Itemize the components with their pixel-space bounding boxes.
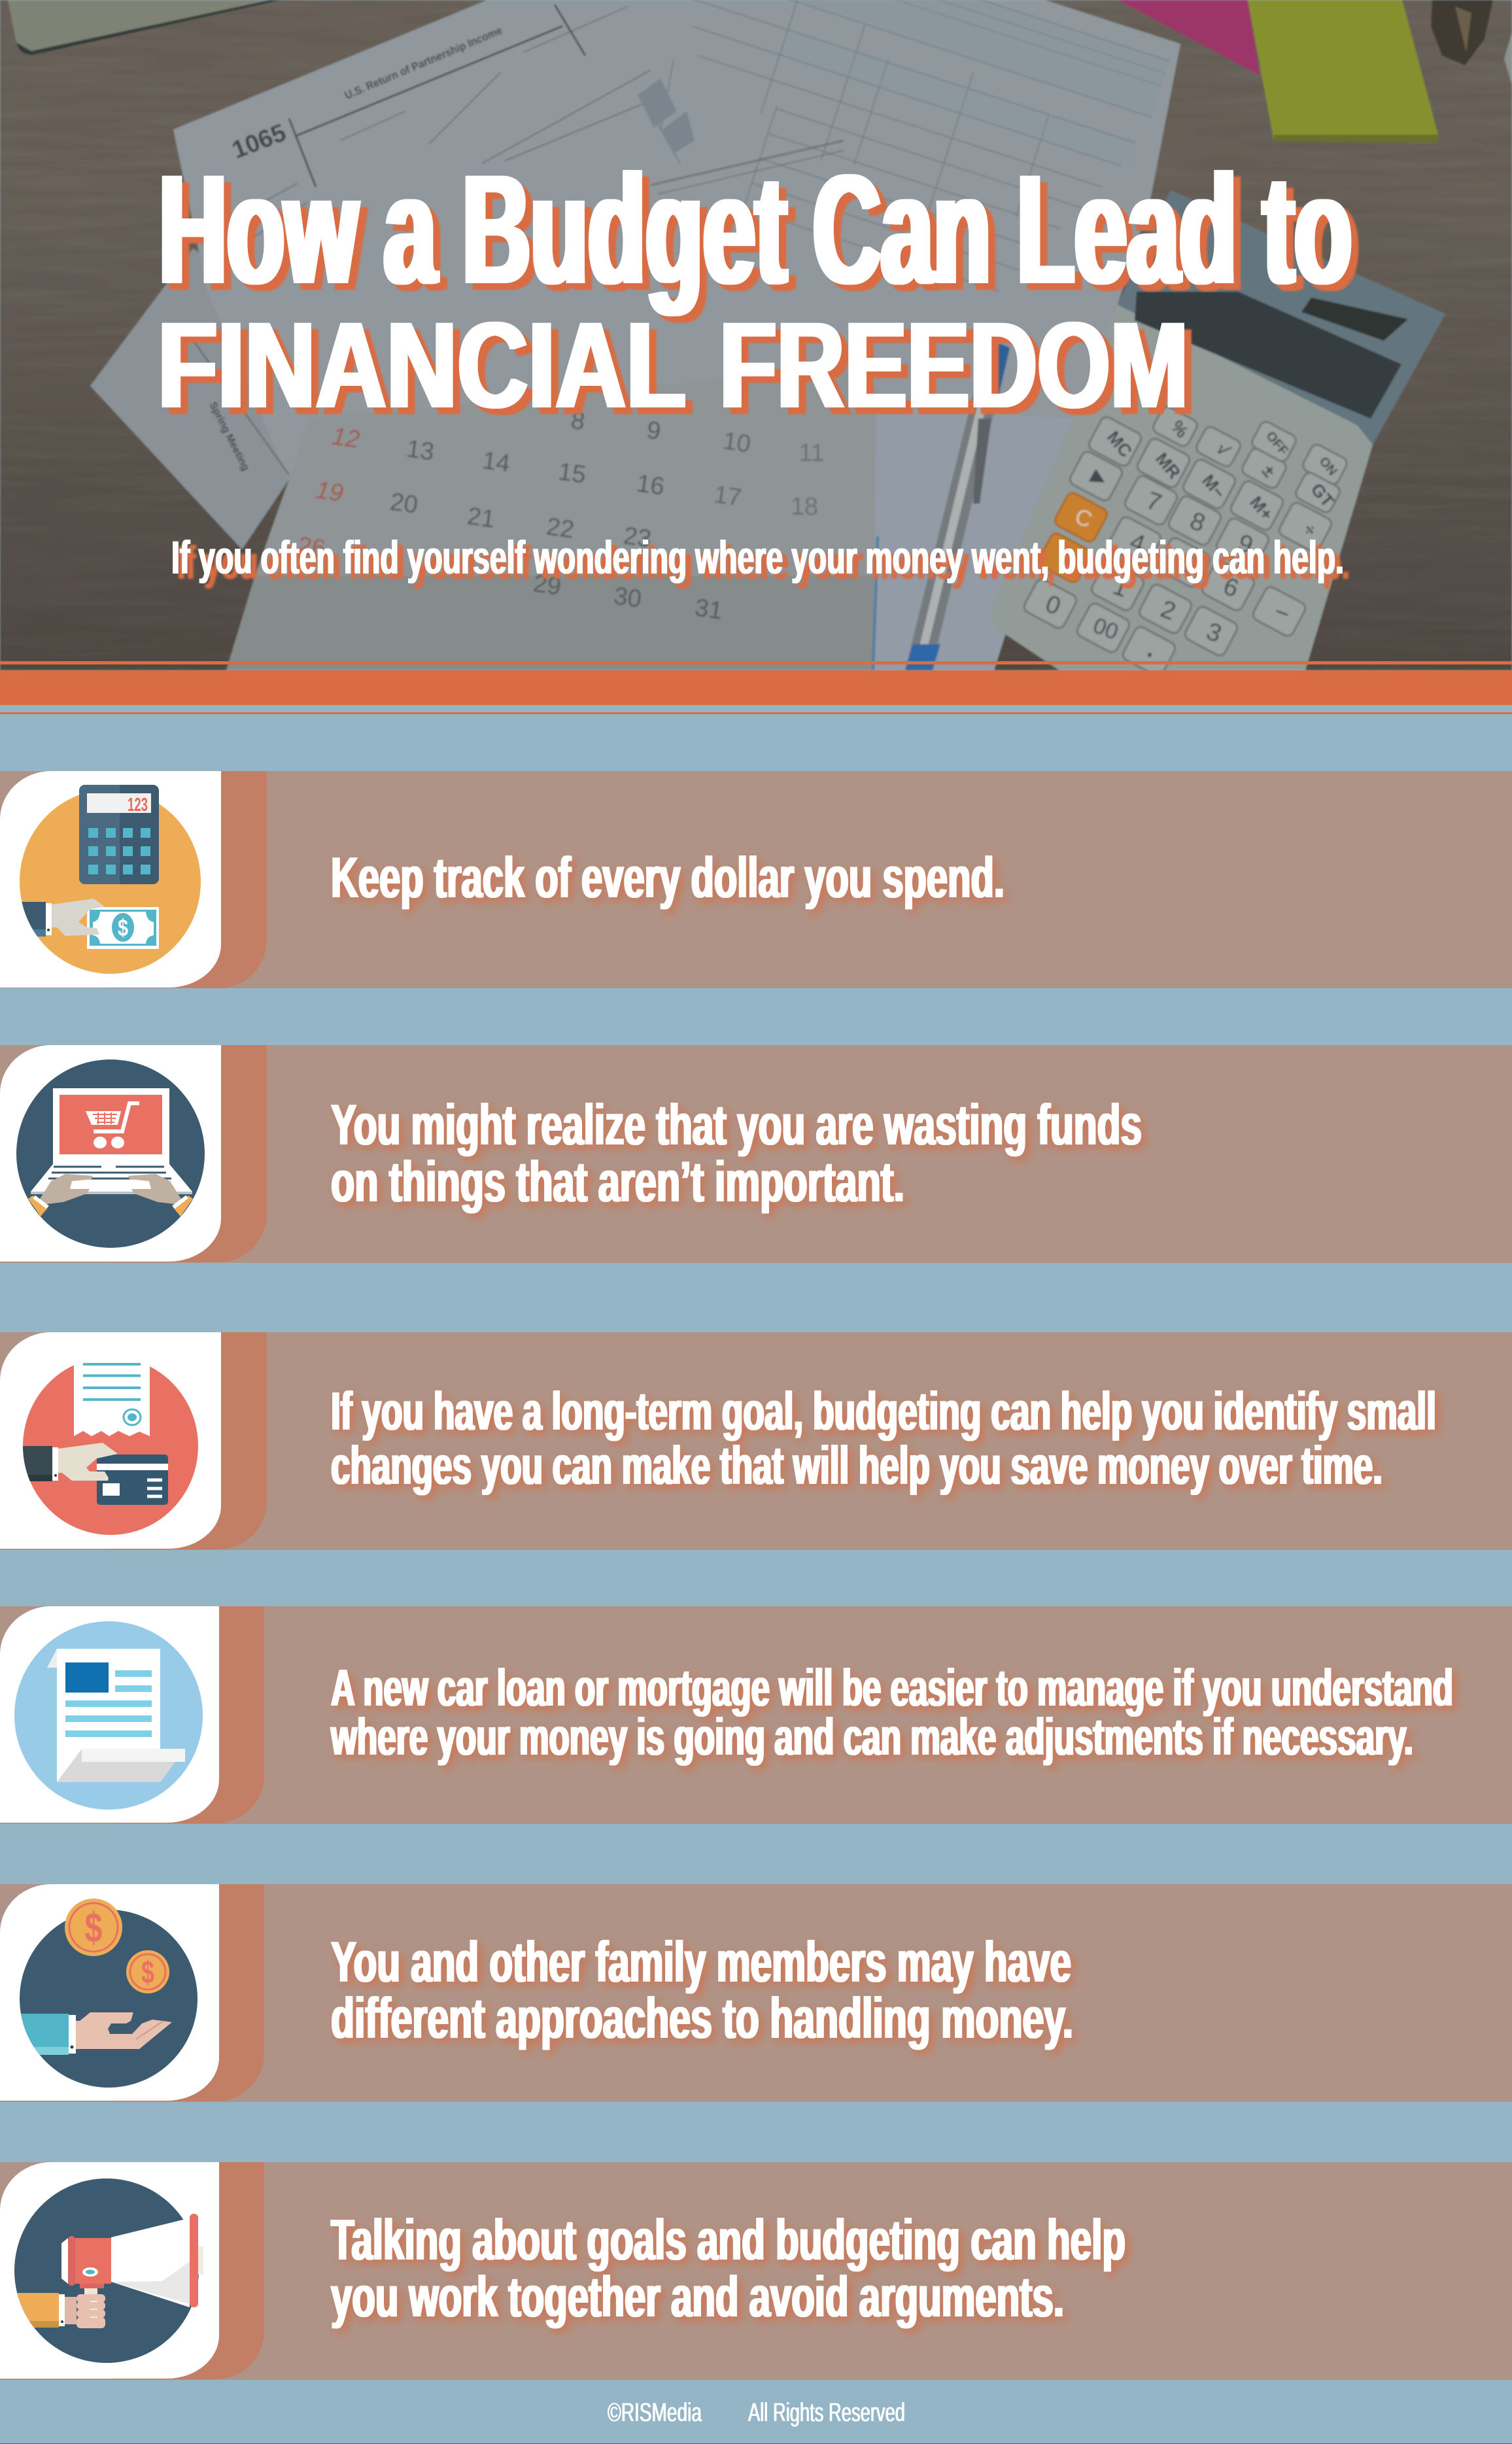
calendar numbers: 23 [622, 522, 653, 553]
calendar numbers: 17 [712, 481, 744, 512]
calendar numbers: 30 [612, 582, 644, 613]
right tax form table [693, 0, 1169, 292]
footer credits: All Rights Reserved [748, 2398, 905, 2427]
form title text in photo [207, 24, 504, 473]
icon: coins above open hand: $ [85, 1904, 102, 1951]
panel: row 3 [0, 1332, 1512, 1550]
calculator: 9 [1234, 529, 1256, 560]
panel: row 6 [0, 2162, 1512, 2380]
calendar numbers: 11 [799, 439, 825, 467]
calendar numbers: 12 [330, 422, 362, 454]
title line 2: FREEDOM [719, 296, 1188, 434]
icon: coins above open hand: $ [141, 1955, 154, 1990]
calculator: 5 [1175, 549, 1197, 579]
row 6 text: you work together and avoid arguments. [331, 2264, 1064, 2329]
title line 2: FINANCIAL [158, 296, 686, 434]
calculator: 00 [1090, 613, 1122, 645]
calculator: M+ [1246, 492, 1277, 525]
calculator: OFF [1263, 429, 1291, 458]
calendar numbers: 21 [466, 502, 497, 534]
calculator: 0 [1042, 590, 1064, 621]
footer credits [608, 2398, 905, 2427]
row 5 text: You and other family members may have [331, 1929, 1071, 1994]
row 3 text [331, 1381, 1436, 1496]
calendar numbers: 22 [545, 513, 576, 544]
calculator: 3 [1203, 617, 1225, 648]
calculator: √ [1212, 439, 1233, 460]
calendar numbers: 9 [645, 417, 662, 445]
icon: coins above open hand [20, 1899, 198, 2088]
calendar numbers: 10 [721, 427, 753, 458]
bottom edge line [0, 2443, 1512, 2444]
form title text in photo: Spring Meeting [207, 400, 251, 473]
calculator: − [1270, 598, 1294, 628]
calculator: 7 [1143, 487, 1165, 517]
row 5 text [331, 1929, 1073, 2050]
pen [905, 343, 1010, 670]
calendar numbers: 19 [314, 476, 345, 508]
calculator: M− [1198, 471, 1229, 503]
orange divider bands [0, 661, 1512, 714]
calendar numbers: 26 [296, 532, 328, 563]
header photo: desk with tax forms, calendar and calculator [0, 0, 1512, 678]
calculator: 6 [1220, 572, 1242, 603]
calculator: C [1072, 504, 1095, 533]
calendar numbers: 20 [388, 488, 420, 519]
panel: row 2 [0, 1045, 1512, 1263]
calendar numbers: 15 [557, 458, 588, 489]
calendar numbers [296, 407, 825, 625]
panel: row 5 [0, 1884, 1512, 2102]
calculator: 8 [1186, 507, 1209, 538]
calculator: . [1144, 635, 1160, 663]
calendar numbers: 31 [693, 594, 725, 625]
calculator: 2 [1157, 595, 1179, 626]
calendar numbers: 13 [405, 435, 436, 466]
icon: calculator and hand with banknote: 123 [128, 795, 148, 816]
calculator: ▶ [1088, 466, 1110, 490]
row 4 text [330, 1659, 1453, 1766]
calendar numbers: 8 [569, 407, 587, 436]
panel: row 1 [0, 771, 1512, 988]
panel: row 4 [0, 1606, 1512, 1824]
calculator: ON [1316, 455, 1340, 479]
icon: document [14, 1621, 203, 1810]
calendar numbers: 16 [635, 470, 666, 501]
row 1 text: Keep track of every dollar you spend. [331, 845, 1005, 910]
icon: receipt and hand with credit card [23, 1357, 198, 1535]
calendar numbers: 29 [532, 570, 563, 601]
calculator: MC [1103, 427, 1136, 461]
calculator: ÷ [1299, 520, 1320, 540]
row 6 text [331, 2207, 1125, 2329]
icon: laptop shopping cart with hands [16, 1059, 205, 1248]
row 2 text: You might realize that you are wasting funds [331, 1092, 1142, 1157]
title [158, 142, 1352, 434]
row 5 text: different approaches to handling money. [331, 1986, 1073, 2050]
calendar numbers: 14 [481, 447, 512, 478]
row 6 text: Talking about goals and budgeting can help [331, 2207, 1125, 2272]
calculator: GT [1307, 479, 1338, 511]
footer credits: ©RISMedia [608, 2398, 702, 2427]
form title text in photo: 1065 [228, 119, 290, 164]
form title text in photo: U.S. Return of Partnership Income [343, 24, 504, 102]
row 2 text [331, 1092, 1142, 1214]
calculator: MR [1152, 449, 1184, 483]
icon: calculator and hand with banknote: $ [118, 914, 128, 941]
icon: megaphone in hand [14, 2178, 203, 2363]
icon: calculator and hand with banknote [20, 785, 201, 974]
calculator: ± [1258, 461, 1279, 481]
left tax form details [193, 5, 844, 475]
calculator: 1 [1109, 572, 1131, 603]
calculator: % [1167, 417, 1192, 441]
title line 2 [158, 296, 1188, 434]
row 2 text: on things that aren’t important. [331, 1149, 904, 1214]
calculator: 4 [1126, 528, 1148, 559]
calendar numbers: 18 [791, 493, 818, 521]
calculator [991, 190, 1445, 678]
